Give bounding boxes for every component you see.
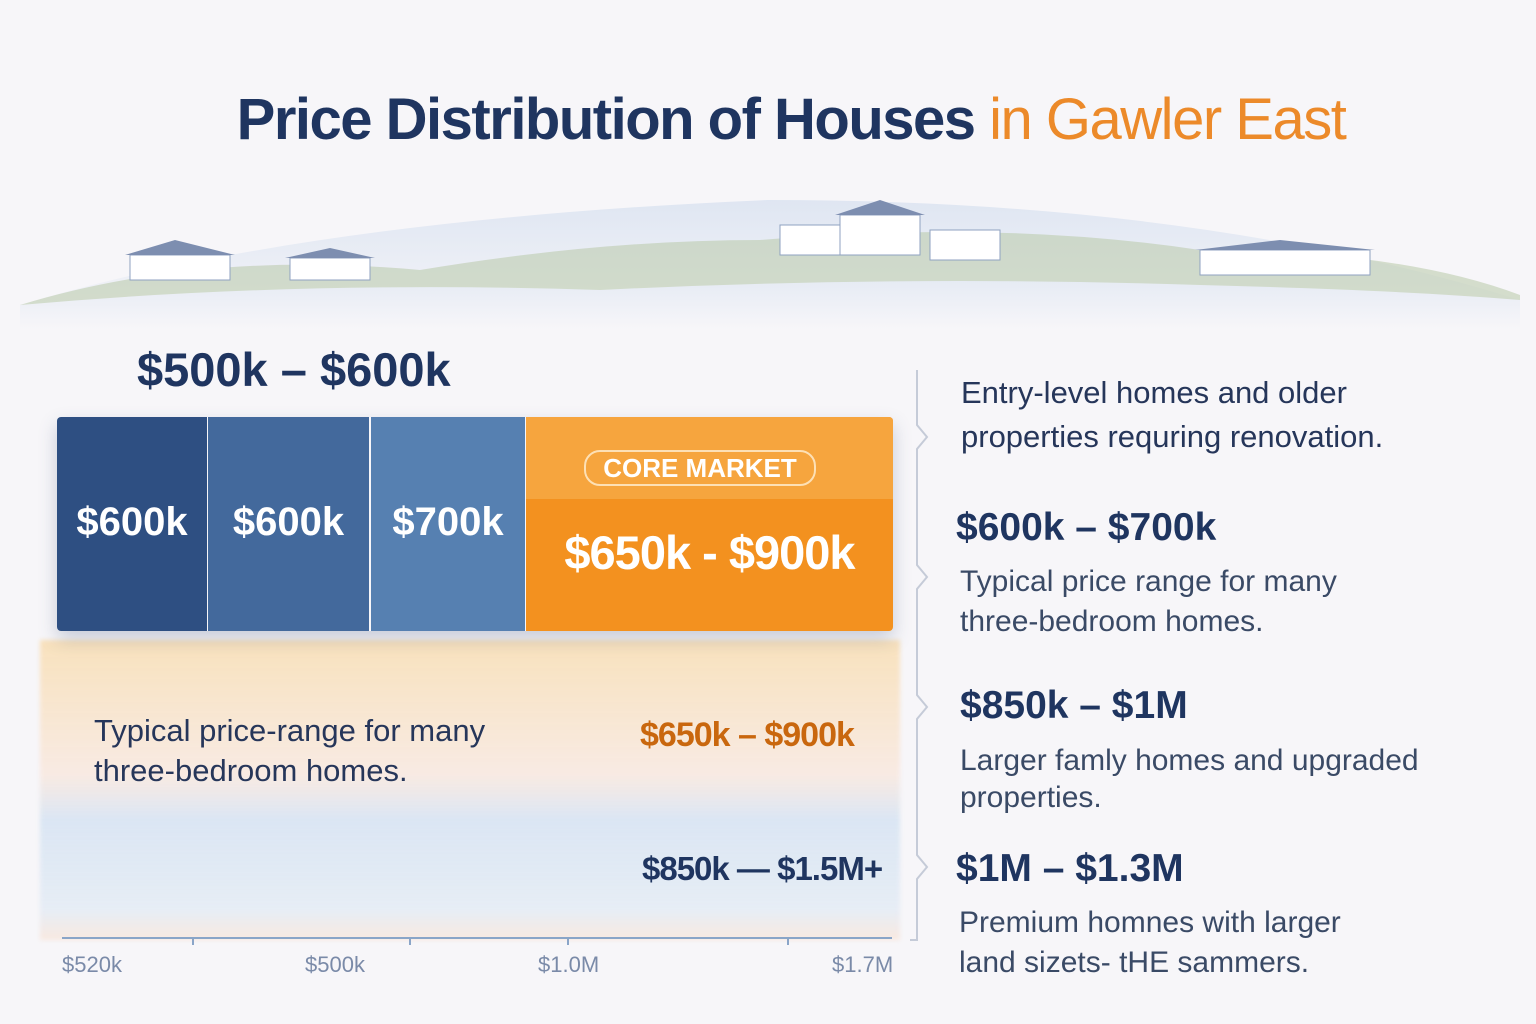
right: $600k-$700k: $600k – $700k (956, 506, 1216, 549)
bracket line (910, 370, 928, 941)
segment $600k 2: $600k (233, 500, 344, 544)
segment $600k (57, 417, 207, 631)
right: $1M-$1.3M: land sizets- tHE sammers. (959, 946, 1309, 979)
segment $700k: $700k (392, 500, 504, 544)
lower text block (94, 713, 485, 788)
right: $600k-$700k: three-bedroom homes. (960, 605, 1264, 638)
right text: entry level: properties requring renovation. (961, 419, 1383, 454)
axis labels (62, 952, 893, 977)
right: $850k-$1M: properties. (960, 781, 1102, 814)
axis labels: $1.7M (832, 952, 893, 977)
right: $1M-$1.3M: Premium homnes with larger (959, 906, 1341, 939)
right text: entry level (961, 375, 1383, 454)
segment $600k: $600k (76, 500, 188, 544)
heading: $500k-$600k: $500k – $600k (137, 343, 451, 396)
lower text block: three-bedroom homes. (94, 753, 408, 788)
axis labels: $1.0M (538, 952, 599, 977)
axis labels: $520k (62, 952, 122, 977)
range label: $650k - $900k (564, 526, 855, 579)
segment $700k (371, 417, 525, 631)
right: $850k-$1M (960, 684, 1419, 814)
segment $600k 2 (208, 417, 369, 631)
right: $850k-$1M: $850k – $1M (960, 684, 1188, 727)
core market pill: CORE MARKET (603, 453, 797, 483)
axis (62, 937, 892, 939)
right: $1M-$1.3M (956, 847, 1341, 979)
right: $600k-$700k (956, 506, 1337, 638)
title: Price Distribution of Houses in Gawler East (237, 87, 1345, 152)
lower text block: Typical price-range for many (94, 713, 485, 748)
orange range label: $650k – $900k (640, 716, 854, 754)
core market segment (526, 417, 893, 631)
soft gradient area below bar (40, 640, 900, 940)
right: $850k-$1M: Larger famly homes and upgraded (960, 744, 1419, 777)
right text: entry level: Entry-level homes and older (961, 375, 1347, 410)
axis labels: $500k (305, 952, 365, 977)
blue range label: $850k — $1.5M+ (642, 850, 882, 887)
right: $1M-$1.3M: $1M – $1.3M (956, 847, 1184, 890)
landscape illustration (20, 200, 1520, 306)
right: $600k-$700k: Typical price range for many (960, 565, 1337, 598)
core market pill (584, 450, 816, 486)
price bar (57, 417, 893, 631)
